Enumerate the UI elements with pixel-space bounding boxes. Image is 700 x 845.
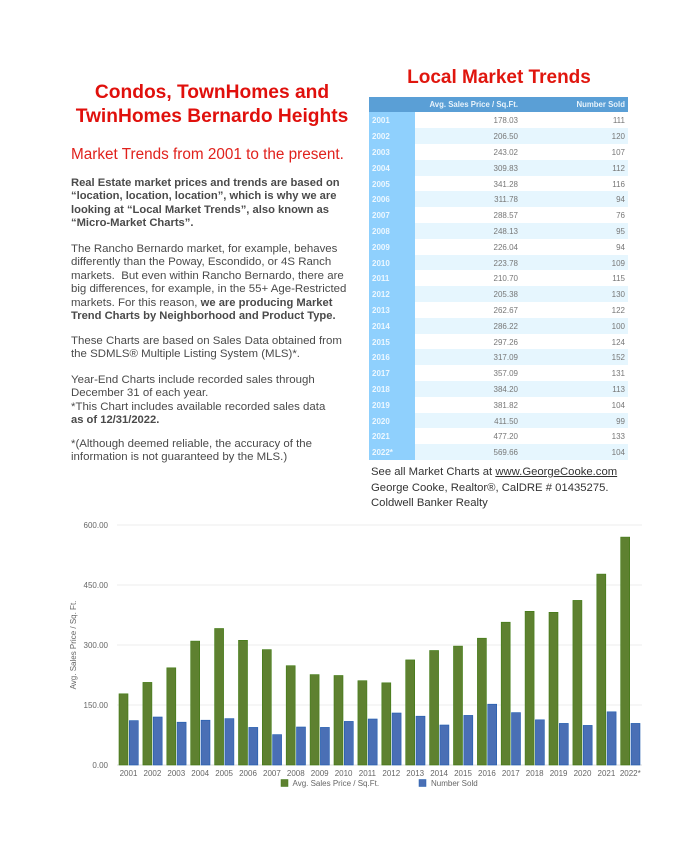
y axis labels: 600.00 [84,521,109,530]
table: market trends by year: 2004 [372,164,390,173]
table: market trends by year: 2013 [372,306,390,315]
text block: intro [71,177,340,229]
x axis labels: 2012 [382,769,401,778]
table: market trends by year: 76 [616,211,625,220]
x axis labels: 2019 [550,769,568,778]
table: market trends by year: 206.50 [494,132,518,141]
table: market trends by year: 226.04 [494,243,518,252]
table: market trends by year: 381.82 [494,401,518,410]
text block: intro: “location, location, location”, which is why we are [71,190,336,202]
x axis labels: 2005 [215,769,234,778]
table: market trends by year: 107 [612,148,625,157]
table: market trends by year: 2021 [372,432,390,441]
y axis labels: 300.00 [84,641,109,650]
x axis labels: 2003 [167,769,186,778]
table: market trends by year: 2001 [372,116,390,125]
table: market trends by year: 205.38 [494,290,518,299]
table: market trends by year: 2020 [372,417,390,426]
table header: Avg. Sales Price / Sq.Ft. [429,100,518,109]
table: market trends by year: 2007 [372,211,390,220]
text block: disclaimer: *(Although deemed reliable, the accuracy of the [71,438,312,450]
x axis labels: 2010 [335,769,353,778]
table: market trends by year: 2017 [372,369,390,378]
table: market trends by year: 116 [612,180,625,189]
x axis labels: 2007 [263,769,281,778]
table: market trends by year: 357.09 [494,369,518,378]
table: market trends by year: 2009 [372,243,390,252]
text block: disclaimer: information is not guaranteed by the MLS.) [71,451,287,463]
text block: Rancho Bernardo market: markets. But even within Rancho Bernardo, there are [71,270,344,282]
legend: Avg. Sales Price / Sq.Ft. [292,779,379,788]
table: market trends by year: 122 [612,306,625,315]
table: market trends by year: 131 [612,369,625,378]
table: market trends by year: 2006 [372,195,390,204]
table: market trends by year: 133 [612,432,625,441]
x axis labels [120,769,641,778]
table: market trends by year: 130 [612,290,625,299]
table header [369,97,628,112]
x axis labels: 2004 [191,769,210,778]
table: market trends by year: 111 [613,116,625,125]
table: market trends by year: 124 [612,338,625,347]
text block: year-end note: *This Chart includes available recorded sales data [71,401,325,413]
x axis labels: 2015 [454,769,472,778]
x axis labels: 2008 [287,769,305,778]
table: market trends by year: 2008 [372,227,390,236]
table: market trends by year: 112 [612,164,625,173]
title: Condos, TownHomes and [95,82,329,103]
y axis labels: 0.00 [92,761,109,770]
table: market trends by year: 113 [612,385,625,394]
table: market trends by year: 104 [612,448,625,457]
text block: year-end note: as of 12/31/2022. [71,414,159,426]
table: market trends by year: 152 [612,353,625,362]
table: market trends by year: 477.20 [494,432,518,441]
y axis labels [84,521,109,770]
table: market trends by year: 411.50 [494,417,518,426]
table: market trends by year: 384.20 [494,385,518,394]
table: market trends by year: 2014 [372,322,390,331]
title: TwinHomes Bernardo Heights [76,106,348,127]
text block: data source [71,335,342,360]
table: market trends by year: 569.66 [494,448,518,457]
table: market trends by year: 109 [612,259,625,268]
green bars: avg sales price [119,537,630,765]
text block: contact: See all Market Charts at www.GeorgeCooke.com [371,466,617,478]
legend [281,779,478,788]
table: market trends by year: 2010 [372,259,390,268]
table: market trends by year: 311.78 [494,195,518,204]
table: market trends by year: 99 [616,417,625,426]
x axis labels: 2022* [620,769,641,778]
title [76,82,348,127]
text block: intro: “Micro-Market Charts”. [71,217,193,229]
text block: contact [371,466,618,509]
subtitle: Market Trends from 2001 to the present. [71,146,344,163]
text block: year-end note [71,374,326,426]
x axis labels: 2013 [406,769,425,778]
table: market trends by year: 178.03 [494,116,518,125]
table: market trends by year: 248.13 [494,227,518,236]
x axis labels: 2009 [311,769,329,778]
x axis labels: 2002 [144,769,162,778]
x axis labels: 2014 [430,769,449,778]
x axis labels: 2011 [359,769,377,778]
table: market trends by year: 297.26 [494,338,518,347]
text block: data source: These Charts are based on Sales Data obtained from [71,335,342,347]
table: market trends by year: 94 [616,243,625,252]
table: market trends by year [369,97,628,460]
text block: Rancho Bernardo market: The Rancho Bernardo market, for example, behaves [71,243,337,255]
y axis labels: 150.00 [84,701,109,710]
x axis labels: 2020 [574,769,592,778]
text block: intro: Real Estate market prices and trends are based on [71,177,340,189]
x axis labels: 2018 [526,769,544,778]
table: market trends by year: 94 [616,195,625,204]
table: market trends by year: 210.70 [494,274,518,283]
x axis labels: 2006 [239,769,257,778]
table: market trends by year: 95 [616,227,625,236]
text block: year-end note: December 31 of each year. [71,387,208,399]
y axis title: Avg. Sales Price / Sq. Ft. [69,601,78,689]
table: market trends by year: 115 [612,274,625,283]
table: market trends by year: 2003 [372,148,390,157]
text block: data source: the SDMLS® Multiple Listing System (MLS)*. [71,348,300,360]
table: market trends by year: 286.22 [494,322,518,331]
table: market trends by year: 2016 [372,353,390,362]
text block: intro: looking at “Local Market Trends”, also known as [71,204,329,216]
text block: Rancho Bernardo market: big differences, for example, in the 55+ Age-Restricted [71,283,346,295]
table: market trends by year: 2015 [372,338,390,347]
x axis labels: 2001 [120,769,138,778]
table header: Number Sold [576,100,625,109]
y axis labels: 450.00 [84,581,109,590]
table: market trends by year: 100 [612,322,625,331]
table: market trends by year: 2022* [372,448,393,457]
legend: Number Sold [431,779,478,788]
table: market trends by year: 2012 [372,290,390,299]
x axis labels: 2021 [598,769,616,778]
text block: Rancho Bernardo market [71,243,346,322]
text block: disclaimer [71,438,312,463]
text block: Rancho Bernardo market: markets. For this reason, we are producing Market [71,297,332,309]
text block: Rancho Bernardo market: Trend Charts by Neighborhood and Product Type. [71,310,336,322]
table: market trends by year: 104 [612,401,625,410]
text block: contact: George Cooke, Realtor®, CalDRE # 01435275. [371,482,609,494]
x axis labels: 2016 [478,769,496,778]
text block: Rancho Bernardo market: differently than the Poway, Escondido, or 4S Ranch [71,256,331,268]
blue bars: number sold [129,704,640,765]
table: market trends by year: 309.83 [494,164,518,173]
table: market trends by year: 317.09 [494,353,518,362]
table: market trends by year: 2011 [372,274,389,283]
text block: year-end note: Year-End Charts include recorded sales through [71,374,315,386]
table: market trends by year: 288.57 [494,211,518,220]
table: market trends by year: 262.67 [494,306,518,315]
table: market trends by year: 2018 [372,385,390,394]
heading: Local Market Trends: Local Market Trends [407,67,591,88]
table: market trends by year: 243.02 [494,148,518,157]
text block: contact: Coldwell Banker Realty [371,497,488,509]
x axis labels: 2017 [502,769,520,778]
table: market trends by year: 2019 [372,401,390,410]
table: market trends by year: 341.28 [494,180,518,189]
table: market trends by year: 2002 [372,132,390,141]
table: market trends by year: 120 [612,132,625,141]
table: market trends by year: 2005 [372,180,390,189]
table: market trends by year: 223.78 [494,259,518,268]
